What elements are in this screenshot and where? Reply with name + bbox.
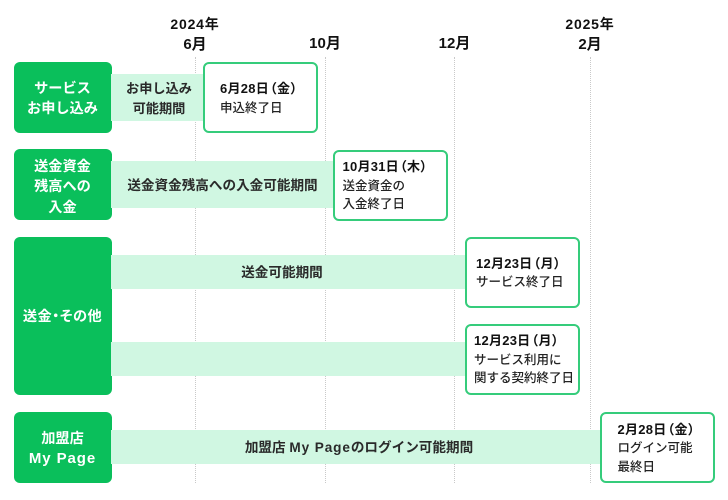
period bar: 加盟店 My Pageのログイン可能期間 [111,430,601,464]
row label: サービスお申し込み: サービス [34,80,91,96]
month label: 10月: 10月 [309,35,341,52]
month label: 2024年6月 [170,16,220,53]
deadline card: 10月31日: 送金資金の [342,179,405,193]
month label: 2025年2月: 2025年 [565,16,615,32]
deadline card: 12月23日 契約終了日: 12月23日（月） [474,333,559,348]
deadline card: 10月31日 [332,150,448,220]
deadline card: 6月28日 [203,62,318,133]
row label: 送金・その他: 送金・その他 [23,309,102,325]
deadline card: 12月23日 契約終了日: サービス利用に [474,353,562,367]
deadline card: 10月31日: 10月31日（木） [342,159,428,174]
deadline card: 10月31日: 入金終了日 [342,197,405,211]
month label: 2024年6月: 6月 [183,36,207,53]
deadline card: 12月23日 サービス終了日 [465,236,580,308]
period bar: お申し込み可能期間 [111,74,204,121]
period bar: 契約期間 [111,342,466,376]
deadline card: 2月28日: 2月28日（金） [618,422,695,437]
month label: 12月: 12月 [439,35,470,52]
row label: 送金資金残高への入金 [14,149,112,220]
row label: 加盟店 My Page: My Page [29,450,96,467]
month label: 2025年2月 [565,16,615,53]
period bar: 加盟店 My Pageのログイン可能期間: 加盟店 My Pageのログイン可能期間 [245,440,473,455]
row label: 送金・その他 [14,236,112,394]
period bar: お申し込み可能期間: お申し込み [126,81,192,96]
deadline card: 12月23日 サービス終了日: サービス終了日 [476,275,564,289]
deadline card: 6月28日: 申込終了日 [220,100,283,114]
month label: 2024年6月: 2024年 [170,16,220,32]
row label: 送金資金残高への入金: 残高への [34,179,91,195]
deadline card: 2月28日 [600,412,714,483]
row label: 送金資金残高への入金: 送金資金 [34,159,91,175]
row label: サービスお申し込み: お申し込み [27,101,98,117]
period bar: 送金可能期間: 送金可能期間 [241,265,323,280]
row label: 送金資金残高への入金: 入金 [48,200,77,216]
period bar: お申し込み可能期間: 可能期間 [133,100,185,116]
deadline card: 12月23日 契約終了日 [465,324,580,394]
row label: サービスお申し込み [14,62,112,133]
period bar: 送金資金残高への入金可能期間 [111,161,334,208]
deadline card: 12月23日 サービス終了日: 12月23日（月） [476,256,561,270]
deadline card: 6月28日: 6月28日（金） [220,81,298,96]
month label: 2025年2月: 2月 [578,36,602,53]
period bar: 送金可能期間 [111,255,466,289]
deadline card: 2月28日: 最終日 [618,460,655,474]
deadline card: 12月23日 契約終了日: 関する契約終了日 [474,371,574,385]
row label: 加盟店 My Page [14,412,112,483]
deadline card: 2月28日: ログイン可能 [618,441,693,455]
period bar: 送金資金残高への入金可能期間: 送金資金残高への入金可能期間 [127,178,318,193]
row label: 加盟店 My Page: 加盟店 [41,430,84,446]
